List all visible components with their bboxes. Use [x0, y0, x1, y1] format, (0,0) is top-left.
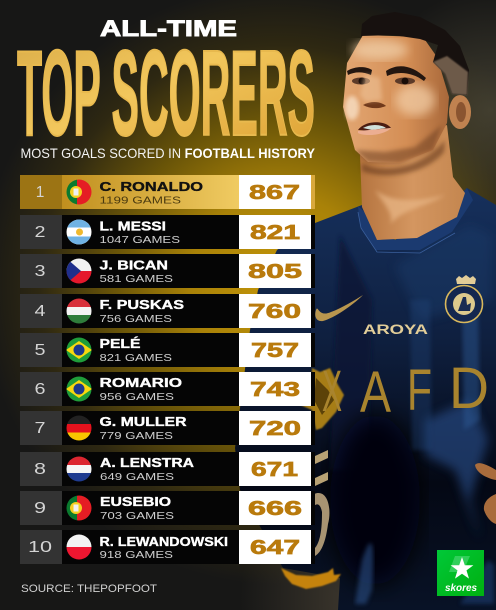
row 8: A. Lenstra: 671 [251, 459, 298, 481]
row 1: C. Ronaldo [20, 175, 315, 209]
row 4: F. Puskas: F. PUSKAS [100, 298, 184, 312]
row 10: R. Lewandowski: 647 [250, 537, 300, 559]
row 6: Romario [20, 372, 315, 406]
row 9: Eusebio: 9 [34, 500, 46, 517]
row 7: G. Muller: 720 [249, 418, 301, 440]
flag: Portugal [66, 496, 92, 520]
row 10: R. Lewandowski [20, 530, 315, 564]
sponsor swoosh [315, 295, 363, 321]
row 10: R. Lewandowski: R. LEWANDOWSKI [100, 535, 228, 549]
row 5: Pele: 5 [34, 342, 46, 359]
eyes [352, 78, 370, 84]
nose [363, 102, 386, 108]
flag: Portugal [66, 180, 92, 204]
player photo illustration [235, 12, 496, 610]
flag: Argentina [66, 219, 92, 245]
row 6: Romario: 956 GAMES [100, 391, 174, 403]
shirt lettering: A [360, 360, 391, 425]
flag: Poland [66, 534, 92, 560]
row 3: J. Bican: J. BICAN [100, 258, 168, 272]
row 8: A. Lenstra: 8 [34, 461, 46, 478]
shirt lettering: X [322, 359, 342, 424]
row 2: L. Messi: 1047 GAMES [100, 234, 180, 246]
row 9: Eusebio: 703 GAMES [100, 510, 174, 522]
row 4: F. Puskas: 756 GAMES [100, 313, 172, 325]
sponsor text: AROYA [363, 322, 428, 337]
row 5: Pele: 757 [251, 340, 299, 362]
row 1: C. Ronaldo: 1 [36, 184, 44, 201]
title: all-time: ALL-TIME [100, 16, 237, 41]
row 2: L. Messi: L. MESSI [100, 220, 166, 234]
row 4: F. Puskas: 760 [248, 301, 301, 323]
row 1: C. Ronaldo: 1199 GAMES [100, 194, 181, 206]
flag: Hungary [66, 298, 92, 324]
row 7: G. Muller: 7 [34, 420, 46, 437]
mouth [358, 122, 391, 131]
subtitle: MOST GOALS SCORED IN FOOTBALL HISTORY [20, 145, 316, 161]
club badge [446, 275, 482, 322]
row 3: J. Bican: 581 GAMES [100, 273, 173, 285]
row 3: J. Bican: 3 [34, 263, 46, 280]
face [343, 35, 449, 163]
shirt lettering: F [407, 358, 432, 423]
row 2: L. Messi [20, 215, 315, 249]
ear [449, 95, 471, 129]
row 2: L. Messi: 821 [250, 222, 300, 244]
hand [475, 463, 496, 524]
eyebrows [347, 66, 426, 81]
row 5: Pele: 821 GAMES [100, 352, 172, 364]
flag: Brazil [66, 376, 92, 402]
row 1: C. Ronaldo: 867 [249, 182, 300, 204]
row 9: Eusebio: 666 [248, 498, 302, 520]
jersey [235, 188, 496, 610]
neck [360, 125, 465, 240]
row 10: R. Lewandowski: 10 [28, 539, 53, 556]
row 7: G. Muller: G. MULLER [100, 415, 186, 429]
row 8: A. Lenstra: A. LENSTRA [100, 456, 194, 470]
row 1: C. Ronaldo: C. RONALDO [100, 180, 203, 194]
row 6: Romario: 6 [34, 381, 46, 398]
row 7: G. Muller [20, 411, 315, 445]
sleeve gold fringe [281, 568, 341, 589]
flag: Czech Republic [66, 258, 92, 284]
row 4: F. Puskas [20, 294, 315, 328]
sleeve stripes [315, 450, 328, 486]
row 4: F. Puskas: 4 [34, 303, 46, 320]
source note: SOURCE: THEPOPFOOT [21, 583, 157, 595]
row 3: J. Bican [20, 254, 315, 288]
shirt lettering: D [449, 356, 489, 421]
row 3: J. Bican: 805 [248, 261, 302, 283]
row 8: A. Lenstra: 649 GAMES [100, 471, 174, 483]
row 6: Romario: 743 [250, 379, 300, 401]
row 8: A. Lenstra [20, 452, 315, 486]
collar [358, 188, 473, 250]
flag: Germany [66, 415, 92, 442]
row 6: Romario: ROMARIO [100, 376, 182, 390]
hair [361, 12, 469, 95]
skores logo [437, 550, 484, 596]
row 9: Eusebio: EUSEBIO [100, 495, 171, 509]
row 2: L. Messi: 2 [34, 224, 46, 241]
sleeve gold emblem [298, 368, 344, 430]
flag: Netherlands [66, 456, 92, 482]
row 5: Pele: PELÉ [100, 336, 140, 351]
row 5: Pele [20, 333, 315, 367]
shirt lettering [322, 356, 489, 425]
row 7: G. Muller: 779 GAMES [100, 430, 173, 442]
row 10: R. Lewandowski: 918 GAMES [100, 549, 173, 561]
flag: Brazil [66, 337, 92, 363]
skores logo: skores [445, 582, 477, 594]
row 9: Eusebio [20, 491, 315, 525]
